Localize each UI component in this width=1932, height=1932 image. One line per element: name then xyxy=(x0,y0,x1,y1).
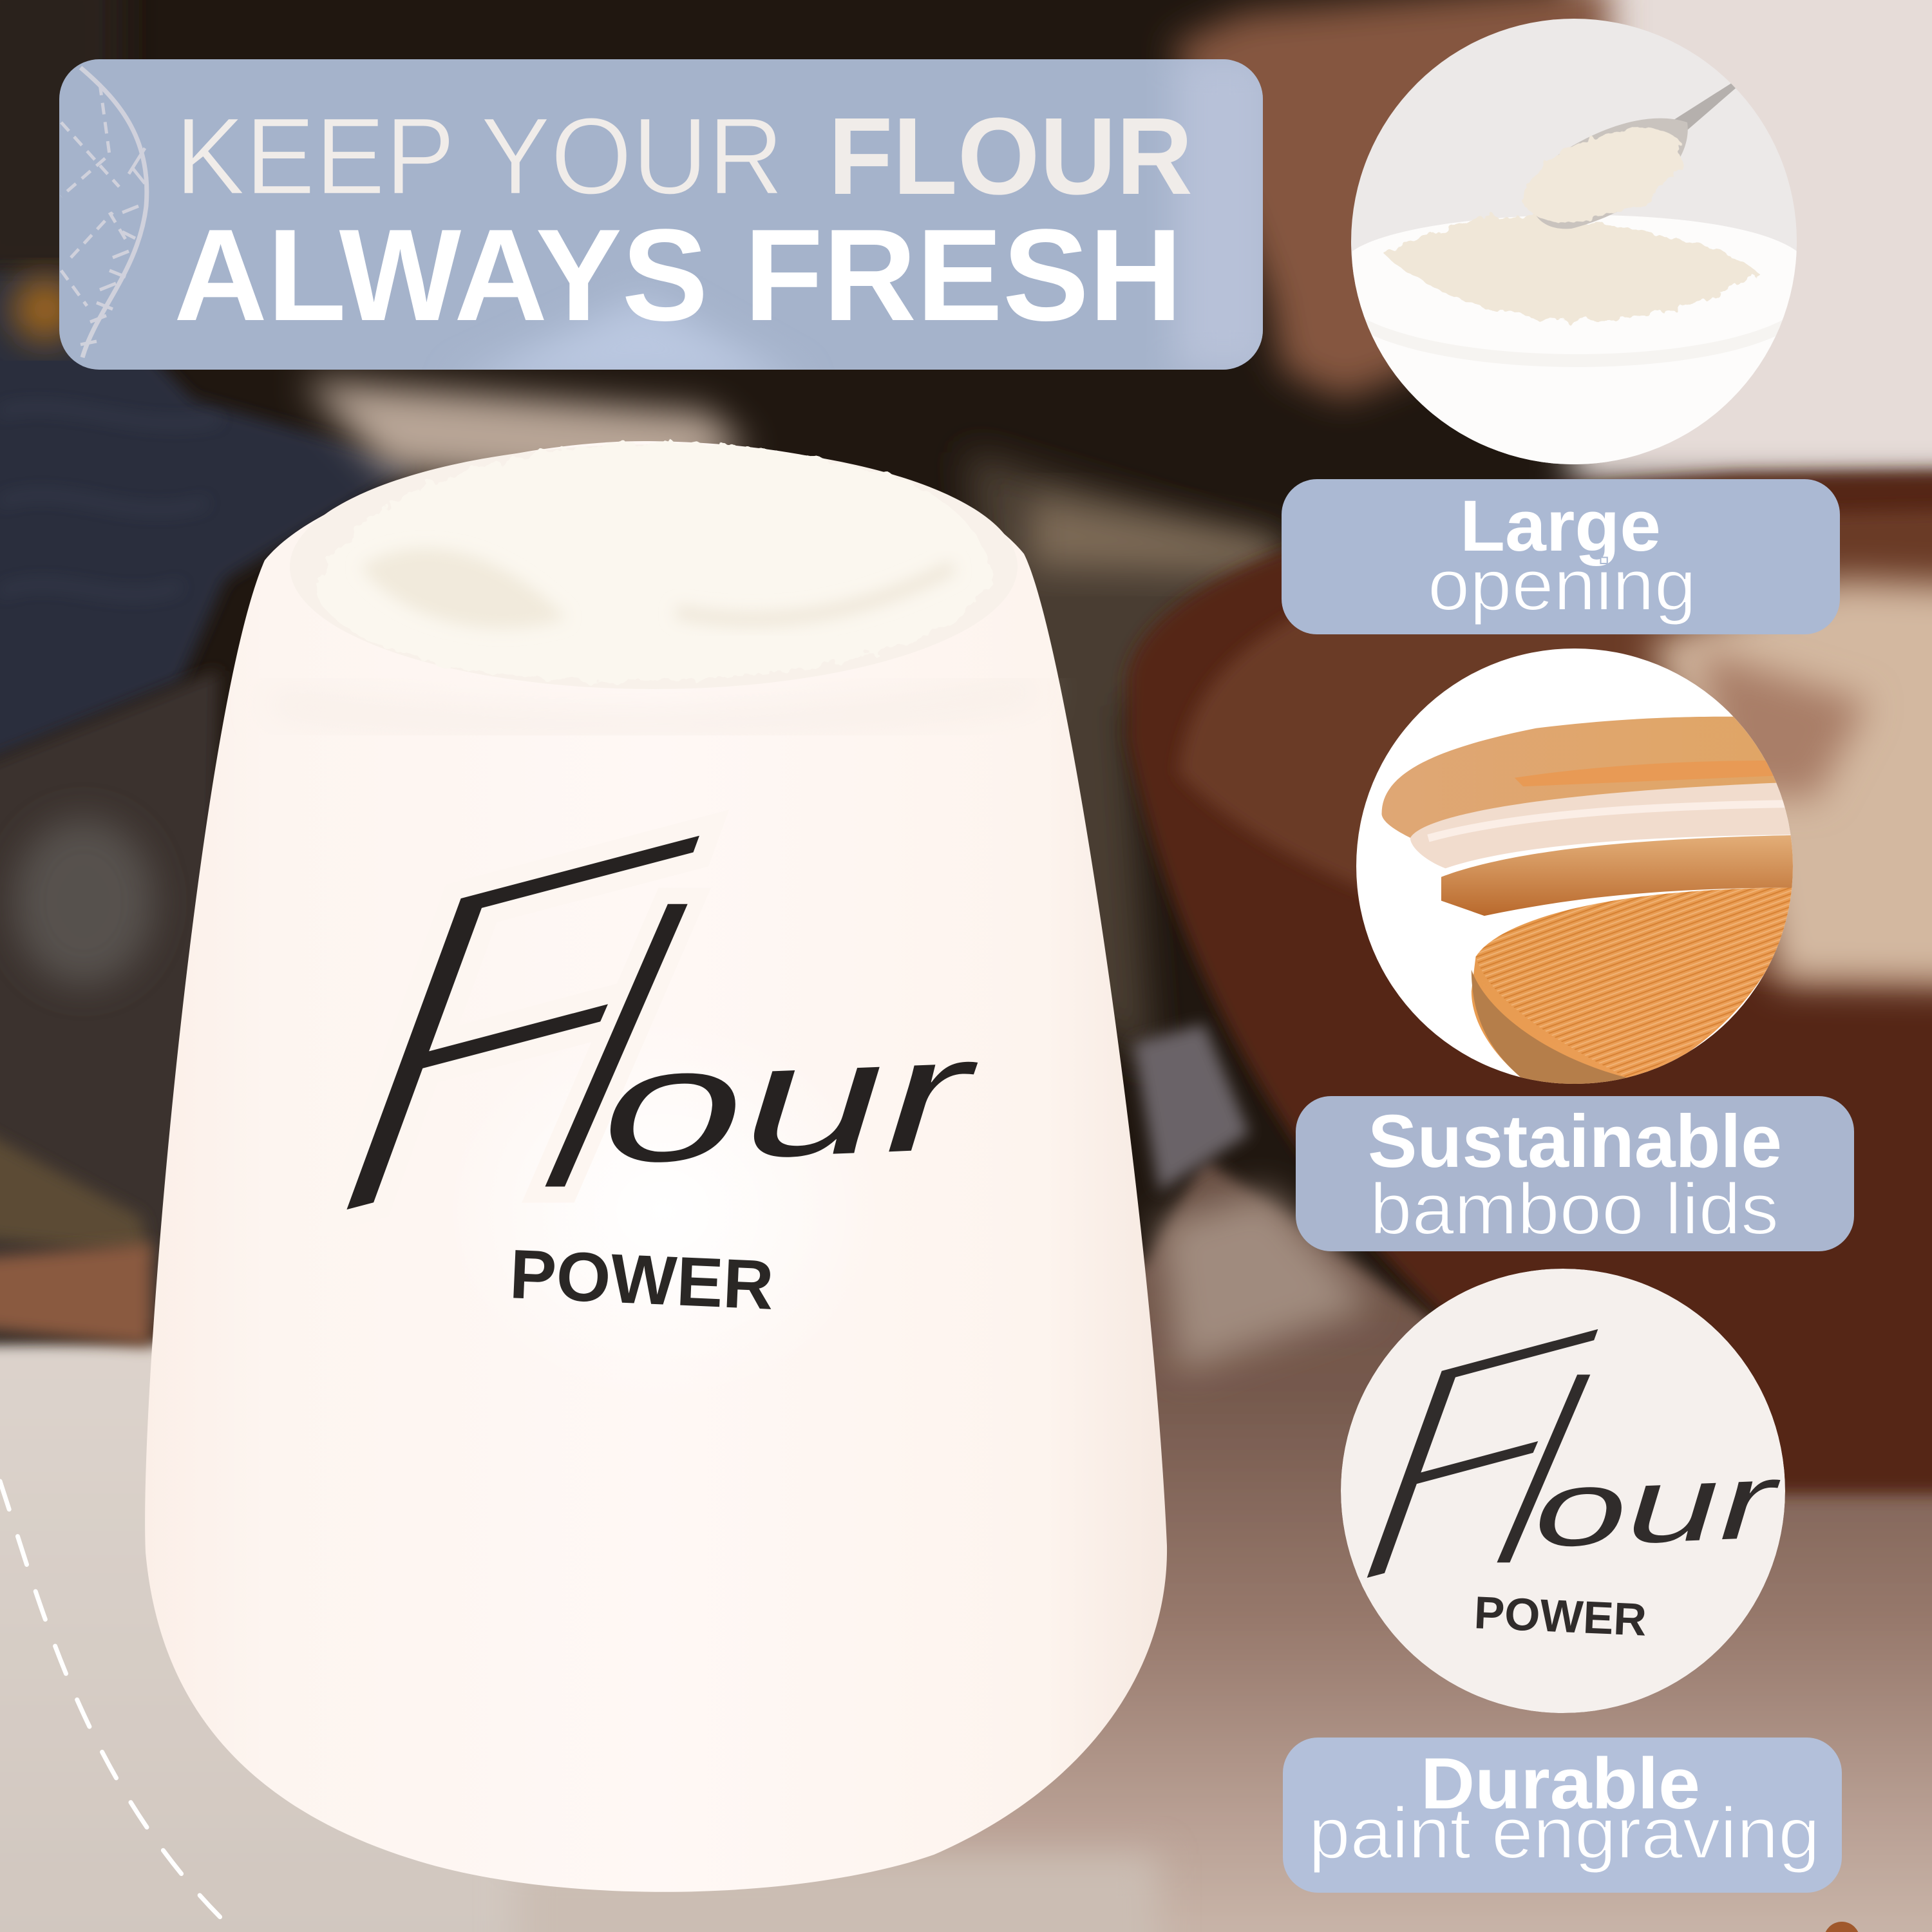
headline banner xyxy=(59,52,1272,386)
headline line 1 xyxy=(175,95,1193,218)
label pill: large opening: opening xyxy=(1428,545,1696,625)
photo circle: Flour Power engraving: our xyxy=(1534,1440,1781,1569)
background: wall behind jar xyxy=(966,451,1282,1069)
flour in jar xyxy=(316,442,989,681)
background: wooden bowl xyxy=(1127,470,1932,1494)
background: counter right xyxy=(773,1159,1932,1932)
headline line 2: ALWAYS FRESH xyxy=(174,202,1182,348)
silicone seal xyxy=(1410,782,1795,868)
photo circle: Flour Power engraving xyxy=(1336,1254,1785,1713)
jar inner rim xyxy=(290,444,1018,689)
top bamboo lid xyxy=(1382,717,1795,838)
spoon xyxy=(1674,84,1736,130)
dashed decorative line xyxy=(0,1481,229,1926)
background: counter left xyxy=(0,1343,786,1932)
headline line 1: KEEP YOUR xyxy=(175,95,784,218)
label pill: sustainable bamboo lids: bamboo lids xyxy=(1370,1169,1779,1249)
jar lettering: Flour: F xyxy=(299,723,738,1323)
background: foil xyxy=(0,1243,151,1346)
photo circle: Flour Power engraving: F xyxy=(1336,1254,1623,1654)
background: bowl interior xyxy=(1179,509,1932,985)
bowl xyxy=(1352,215,1797,470)
icon: whisk sketch decoration xyxy=(61,68,147,357)
jar lettering: Flour xyxy=(299,723,978,1323)
jar lettering: Flour: our xyxy=(602,1003,978,1197)
label pill: sustainable bamboo lids: Sustainable xyxy=(1368,1099,1782,1183)
jar body xyxy=(145,441,1167,1892)
jar lettering: Flour: l xyxy=(506,821,719,1282)
headline line 1: FLOUR xyxy=(828,95,1193,218)
photo circle: flour bowl and spoon xyxy=(1346,13,1803,470)
label pill: durable paint engraving: paint engraving xyxy=(1309,1793,1820,1873)
label pill: durable paint engraving xyxy=(1283,1738,1842,1893)
background: flour in bowl xyxy=(1649,580,1932,985)
background: plate xyxy=(303,380,747,489)
label pill: durable paint engraving: Durable xyxy=(1421,1743,1700,1824)
jar lettering: POWER: POWER xyxy=(508,1235,775,1324)
label pill: large opening xyxy=(1282,479,1840,634)
photo circle: Flour Power engraving: l xyxy=(1471,1320,1611,1626)
bamboo lid disc xyxy=(1472,888,1795,1086)
POWER small: POWER xyxy=(1473,1587,1647,1646)
background: navy fabric xyxy=(0,270,419,773)
background: apron xyxy=(1571,0,1932,483)
label pill: large opening: Large xyxy=(1460,486,1661,566)
ceramic jar xyxy=(145,441,1167,1892)
lower bamboo lid xyxy=(1441,835,1795,916)
background: hand xyxy=(1172,0,1610,399)
photo circle: bamboo lids xyxy=(1346,638,1810,1101)
spoon flour xyxy=(1522,127,1683,223)
label pill: sustainable bamboo lids xyxy=(1296,1096,1854,1251)
background: tray xyxy=(0,670,219,1340)
flour mound xyxy=(1385,214,1759,321)
